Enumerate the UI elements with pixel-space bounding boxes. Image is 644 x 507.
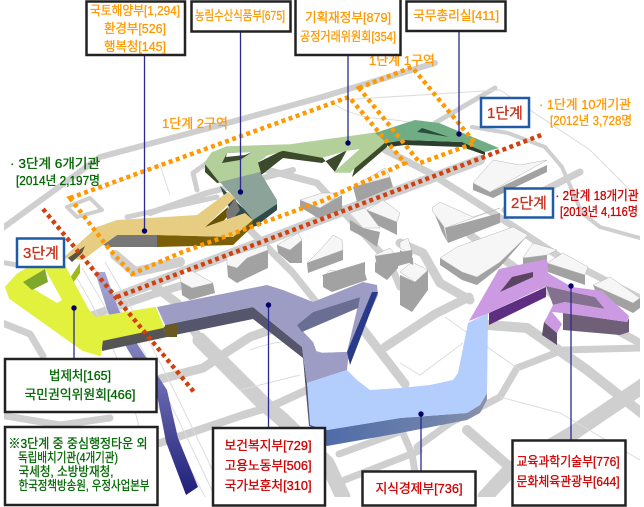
callout: prime minister office box: 국무총리실[411] [413, 8, 499, 23]
zone label: phase 1 zone 1: 1단계 1구역 [369, 53, 435, 68]
leader line: agriculture [238, 32, 243, 195]
block: education culture purple [469, 259, 629, 345]
leader line: health [266, 302, 271, 427]
phase label: phase 1: 1단계 [487, 105, 523, 122]
note box: independent agencies: 한국정책방송원, 우정사업본부 [18, 478, 150, 493]
callout: land ministry box: 국토해양부[1,294] [90, 3, 180, 18]
phase label: phase 2 [505, 188, 553, 218]
callout: health box: 국가보훈처[310] [224, 478, 312, 493]
info text: phase 3 [10, 156, 100, 188]
callout: agriculture box [192, 2, 290, 32]
callout: finance box: 기획재정부[879] [305, 10, 391, 25]
callout: health box: 보건복지부[729] [224, 438, 312, 453]
buildings [179, 160, 640, 313]
phase label: phase 1 [481, 98, 529, 127]
leader line: finance [345, 55, 351, 146]
block: agriculture green [205, 133, 387, 183]
callout: legislation box [5, 359, 156, 412]
callout: prime minister office box [406, 2, 506, 31]
leader line: legislation [71, 305, 77, 358]
callout: knowledge economy box: 지식경제부[736] [376, 481, 462, 496]
phase label: phase 3 [17, 238, 64, 267]
dotted line: phase 1 zone 1 [359, 67, 475, 163]
info text: phase 3: · 3단계 6개기관 [10, 156, 100, 171]
dotted line: phase 2 and 3 boundaries [43, 134, 544, 392]
leader line: education [568, 283, 574, 440]
note box: independent agencies [5, 427, 158, 505]
info text: phase 3: [2014년 2,197명 [16, 173, 100, 188]
dotted line: phase 1 zone 2 [70, 97, 405, 274]
block: yellow section [6, 258, 177, 355]
callout: knowledge economy box [362, 472, 476, 506]
callout: land ministry box: 행복청[145] [104, 39, 166, 54]
block: lavender section [157, 282, 378, 426]
callout: land ministry box [86, 2, 185, 55]
callout: finance box: 공정거래위원회[354] [300, 29, 396, 44]
callout: agriculture box: 농림수산식품부[675] [195, 8, 285, 23]
info text: phase 1 [539, 97, 632, 128]
note box: independent agencies: 독립배치기관(4개기관) [18, 450, 118, 465]
callout: health box [213, 428, 325, 506]
phase label: phase 3: 3단계 [23, 245, 59, 262]
info text: phase 2 [556, 188, 639, 219]
callout: education box: 교육과학기술부[776] [516, 454, 620, 469]
callout: health box: 고용노동부[506] [224, 458, 312, 473]
info text: phase 1: · 1단계 10개기관 [539, 97, 631, 112]
phase label: phase 2: 2단계 [511, 195, 547, 212]
block: teal section [220, 172, 277, 228]
block: knowledge economy blue [307, 313, 488, 446]
block: tan section [63, 192, 253, 262]
note box: independent agencies: ※3단계 중 중심행정타운 외 [8, 436, 148, 451]
block: prime minister green [375, 120, 499, 155]
callout: education box [512, 440, 626, 506]
info text: phase 1: [2012년 3,728명 [550, 113, 632, 128]
callout: legislation box: 국민권익위원회[466] [24, 387, 136, 402]
callout: finance box [296, 0, 400, 55]
leader line: land ministry [142, 55, 147, 234]
callout: land ministry box: 환경부[526] [104, 21, 166, 36]
note box: independent agencies: 국세청, 소방방재청, [18, 464, 114, 479]
leader line: prime minister office [456, 31, 462, 137]
callout: education box: 문화체육관광부[644] [516, 474, 620, 489]
callout: legislation box: 법제처[165] [49, 368, 111, 383]
leader line: knowledge economy [418, 411, 424, 471]
zone label: phase 1 zone 2: 1단계 2구역 [162, 116, 228, 131]
river band [95, 272, 198, 495]
